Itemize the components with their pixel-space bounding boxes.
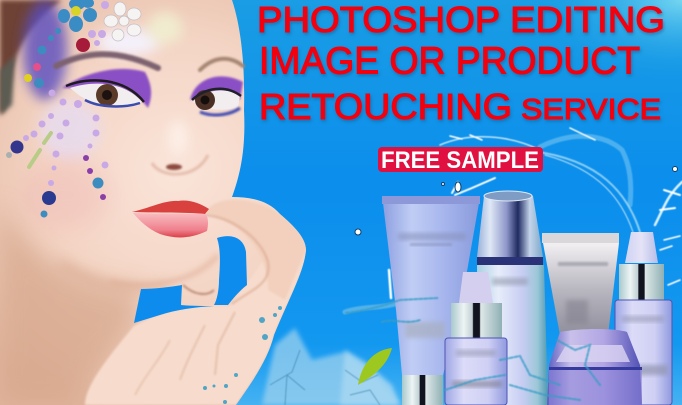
red flower: [76, 38, 90, 52]
lavender jar: [547, 329, 642, 405]
lavender tube: [382, 196, 480, 405]
water pool and splash at the bottom: [262, 328, 400, 405]
face gems: [6, 0, 141, 218]
woman portrait: [0, 0, 320, 405]
lips: [132, 200, 209, 237]
blue gap between fingers: [214, 236, 247, 305]
temple eyeshadow wash: [23, 0, 67, 100]
product group: [346, 191, 672, 405]
free sample badge: FREE SAMPLE: [381, 147, 539, 174]
water splash behind the products: [345, 128, 682, 312]
hair: [0, 0, 62, 115]
upper finger fill: [205, 200, 306, 300]
left eye: [66, 80, 144, 106]
hand fill: [85, 235, 306, 405]
skin silhouette: [0, 0, 320, 405]
eyebrows: [56, 54, 243, 70]
heading word service: SERVICE: [521, 94, 661, 126]
heading: [257, 0, 665, 127]
heading line 1: PHOTOSHOP EDITING: [257, 0, 665, 40]
right dropper bottle: [615, 232, 672, 405]
small gems: [23, 1, 109, 186]
nose shading: [168, 122, 188, 153]
cheek blush: [30, 163, 107, 226]
blue flower: [58, 0, 97, 32]
heading line 3: RETOUCHING: [259, 86, 512, 127]
silver tube: [542, 233, 619, 335]
green leaf: [358, 348, 392, 385]
eyeshadow: [62, 69, 243, 108]
neck shadow: [0, 200, 140, 405]
water droplets over the products: [346, 298, 600, 400]
blue gap between neck and hand: [134, 285, 214, 323]
glass bottle: [477, 191, 548, 405]
chin shadow: [110, 255, 218, 285]
forehead highlight: [96, 28, 160, 56]
heading line 2: IMAGE OR PRODUCT: [259, 40, 640, 82]
droplets on the hand: [203, 306, 282, 404]
white flower: [104, 2, 141, 41]
nostril: [166, 164, 182, 170]
hand shading and finger lines: [135, 215, 268, 395]
jaw shadow: [60, 262, 170, 288]
right eye: [192, 89, 241, 115]
front dropper bottle: [445, 272, 507, 405]
droplets: [355, 166, 678, 235]
